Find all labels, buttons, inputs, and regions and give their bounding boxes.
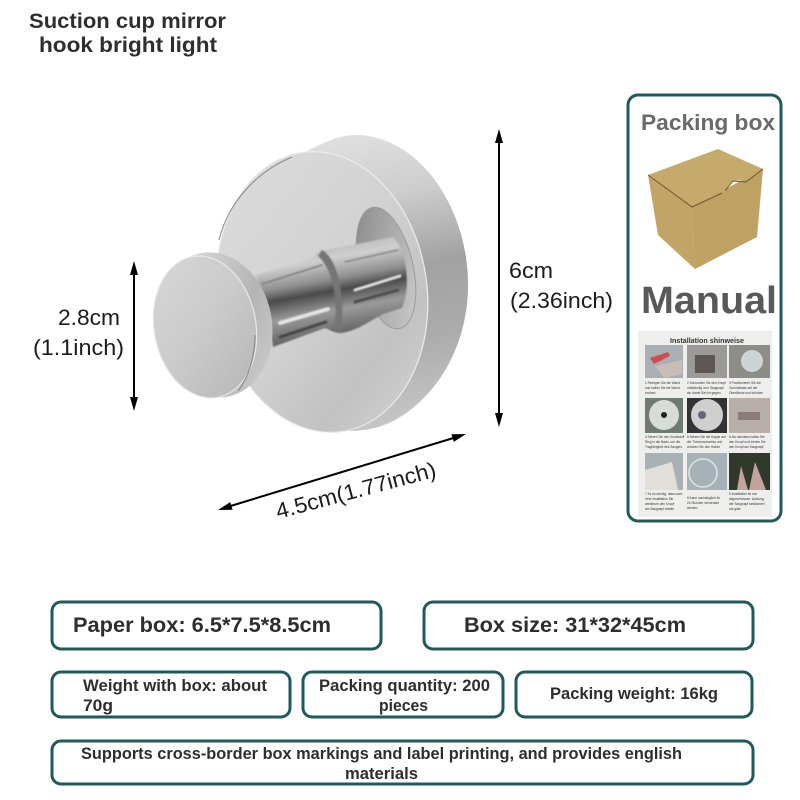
step captions: 24 Stunden verwendet [687, 501, 719, 505]
spec: weight with box [52, 672, 290, 717]
label: knob size: 2.8cm [58, 305, 120, 330]
title [29, 10, 226, 57]
spec: weight with box: Weight with box: about [83, 677, 268, 695]
step captions: 1 Reinigen Sie die Wand [645, 381, 680, 385]
label: knob size [33, 305, 124, 360]
title: hook bright light [39, 34, 217, 57]
step captions: und halten Sie die Wand [645, 386, 680, 390]
step captions [645, 381, 766, 511]
base plate front face [198, 138, 446, 446]
knob face [142, 248, 268, 406]
step photos row 3 [645, 453, 770, 490]
manual sheet: Installation shinweise [670, 336, 744, 345]
step photos row 2 [645, 398, 770, 433]
icon: cardboard box [648, 149, 763, 269]
step captions: 5 Setzen Sie die Kappe auf [687, 435, 726, 439]
step captions: trocken. [645, 391, 656, 395]
spec: cross-border note: Supports cross-border box markings and label printing, and provides english [81, 745, 682, 763]
arrow: knob height [130, 261, 138, 411]
step captions: 8 Kann nachtsüglich für [687, 496, 721, 500]
spec: weight with box: 70g [83, 697, 113, 715]
spec: cross-border note: materials [345, 765, 418, 783]
step captions: vollständig vom Saugnapf [687, 386, 724, 390]
arrow: plate height [495, 129, 503, 427]
step captions: drücken Sie den Haken [687, 445, 720, 449]
step captions: abgeschlossen. Achtung, [729, 497, 765, 501]
step captions: Gummibasis auf der [729, 386, 758, 390]
knob rim [144, 243, 284, 407]
arrow: depth [218, 434, 466, 510]
label: plate size [509, 258, 613, 313]
spec: packing weight: Packing weight: 16kg [550, 685, 718, 703]
base plate side wall [307, 135, 468, 431]
step captions: 9 Installation ist nun [729, 492, 757, 496]
step captions: auf glatt [729, 507, 740, 511]
label: plate size: (2.36inch) [510, 288, 613, 313]
step captions: der Saugnapf funktioniert [729, 502, 765, 506]
label: depth size: 4.5cm(1.77inch) [273, 457, 439, 524]
step captions: die Thermoschweiss und [687, 440, 722, 444]
product photo: mirror hook [142, 135, 468, 446]
step captions: den Knopf am Saugnapf [729, 445, 763, 449]
label: knob size: (1.1inch) [33, 335, 124, 360]
panel: packing box and manual [628, 95, 781, 521]
spec: cross-border note [52, 741, 753, 784]
step captions: 4 Setzen Sie den Kunststoff [645, 435, 684, 439]
step captions: den Knopf und ziehen Sie [729, 440, 766, 444]
spec: box size [424, 602, 753, 649]
title: Suction cup mirror [29, 10, 226, 33]
knob edge shadow [238, 335, 255, 391]
step photos row 1 [645, 345, 770, 378]
spec: paper box: Paper box: 6.5*7.5*8.5cm [73, 614, 331, 637]
shaft collar [318, 250, 342, 331]
step captions: 2 Schrauben Sie den Knopf [687, 381, 726, 385]
step captions: Ring in die Basis, um die [645, 440, 680, 444]
step captions: Tragfähigkeit des Saugers [645, 445, 682, 449]
spec: box size: Box size: 31*32*45cm [464, 614, 686, 637]
shaft reflections [262, 250, 400, 337]
step captions: 3 Positionieren Sie die [729, 381, 761, 385]
spec: packing quantity: Packing quantity: 200 [319, 677, 490, 695]
heading: manual: Manual [641, 280, 777, 322]
spec: paper box [52, 602, 381, 649]
step captions: 6 Als nächstes halten Sie [729, 435, 765, 439]
step captions: am Saugnapf wieder [645, 507, 675, 511]
label: plate size: 6cm [509, 258, 553, 283]
heading: packing box: Packing box [641, 110, 776, 135]
step captions: Ihrer Installation Sie [645, 497, 673, 501]
spec: packing quantity [303, 672, 503, 717]
step captions: werden. [687, 506, 698, 510]
step captions: ab, damit Sie ihn gegen [687, 391, 721, 395]
face edge shadow [219, 157, 292, 240]
manual sheet [638, 331, 772, 517]
base plate hole [346, 202, 426, 334]
step captions: wiederum den Knopf [645, 502, 674, 506]
step captions: 7 Es ist wichtig, dass nach [645, 492, 683, 496]
hook shaft [255, 237, 407, 347]
spec: packing quantity: pieces [379, 697, 428, 715]
spec: packing weight [516, 672, 752, 717]
step captions: Oberfläche und drücken [729, 391, 763, 395]
